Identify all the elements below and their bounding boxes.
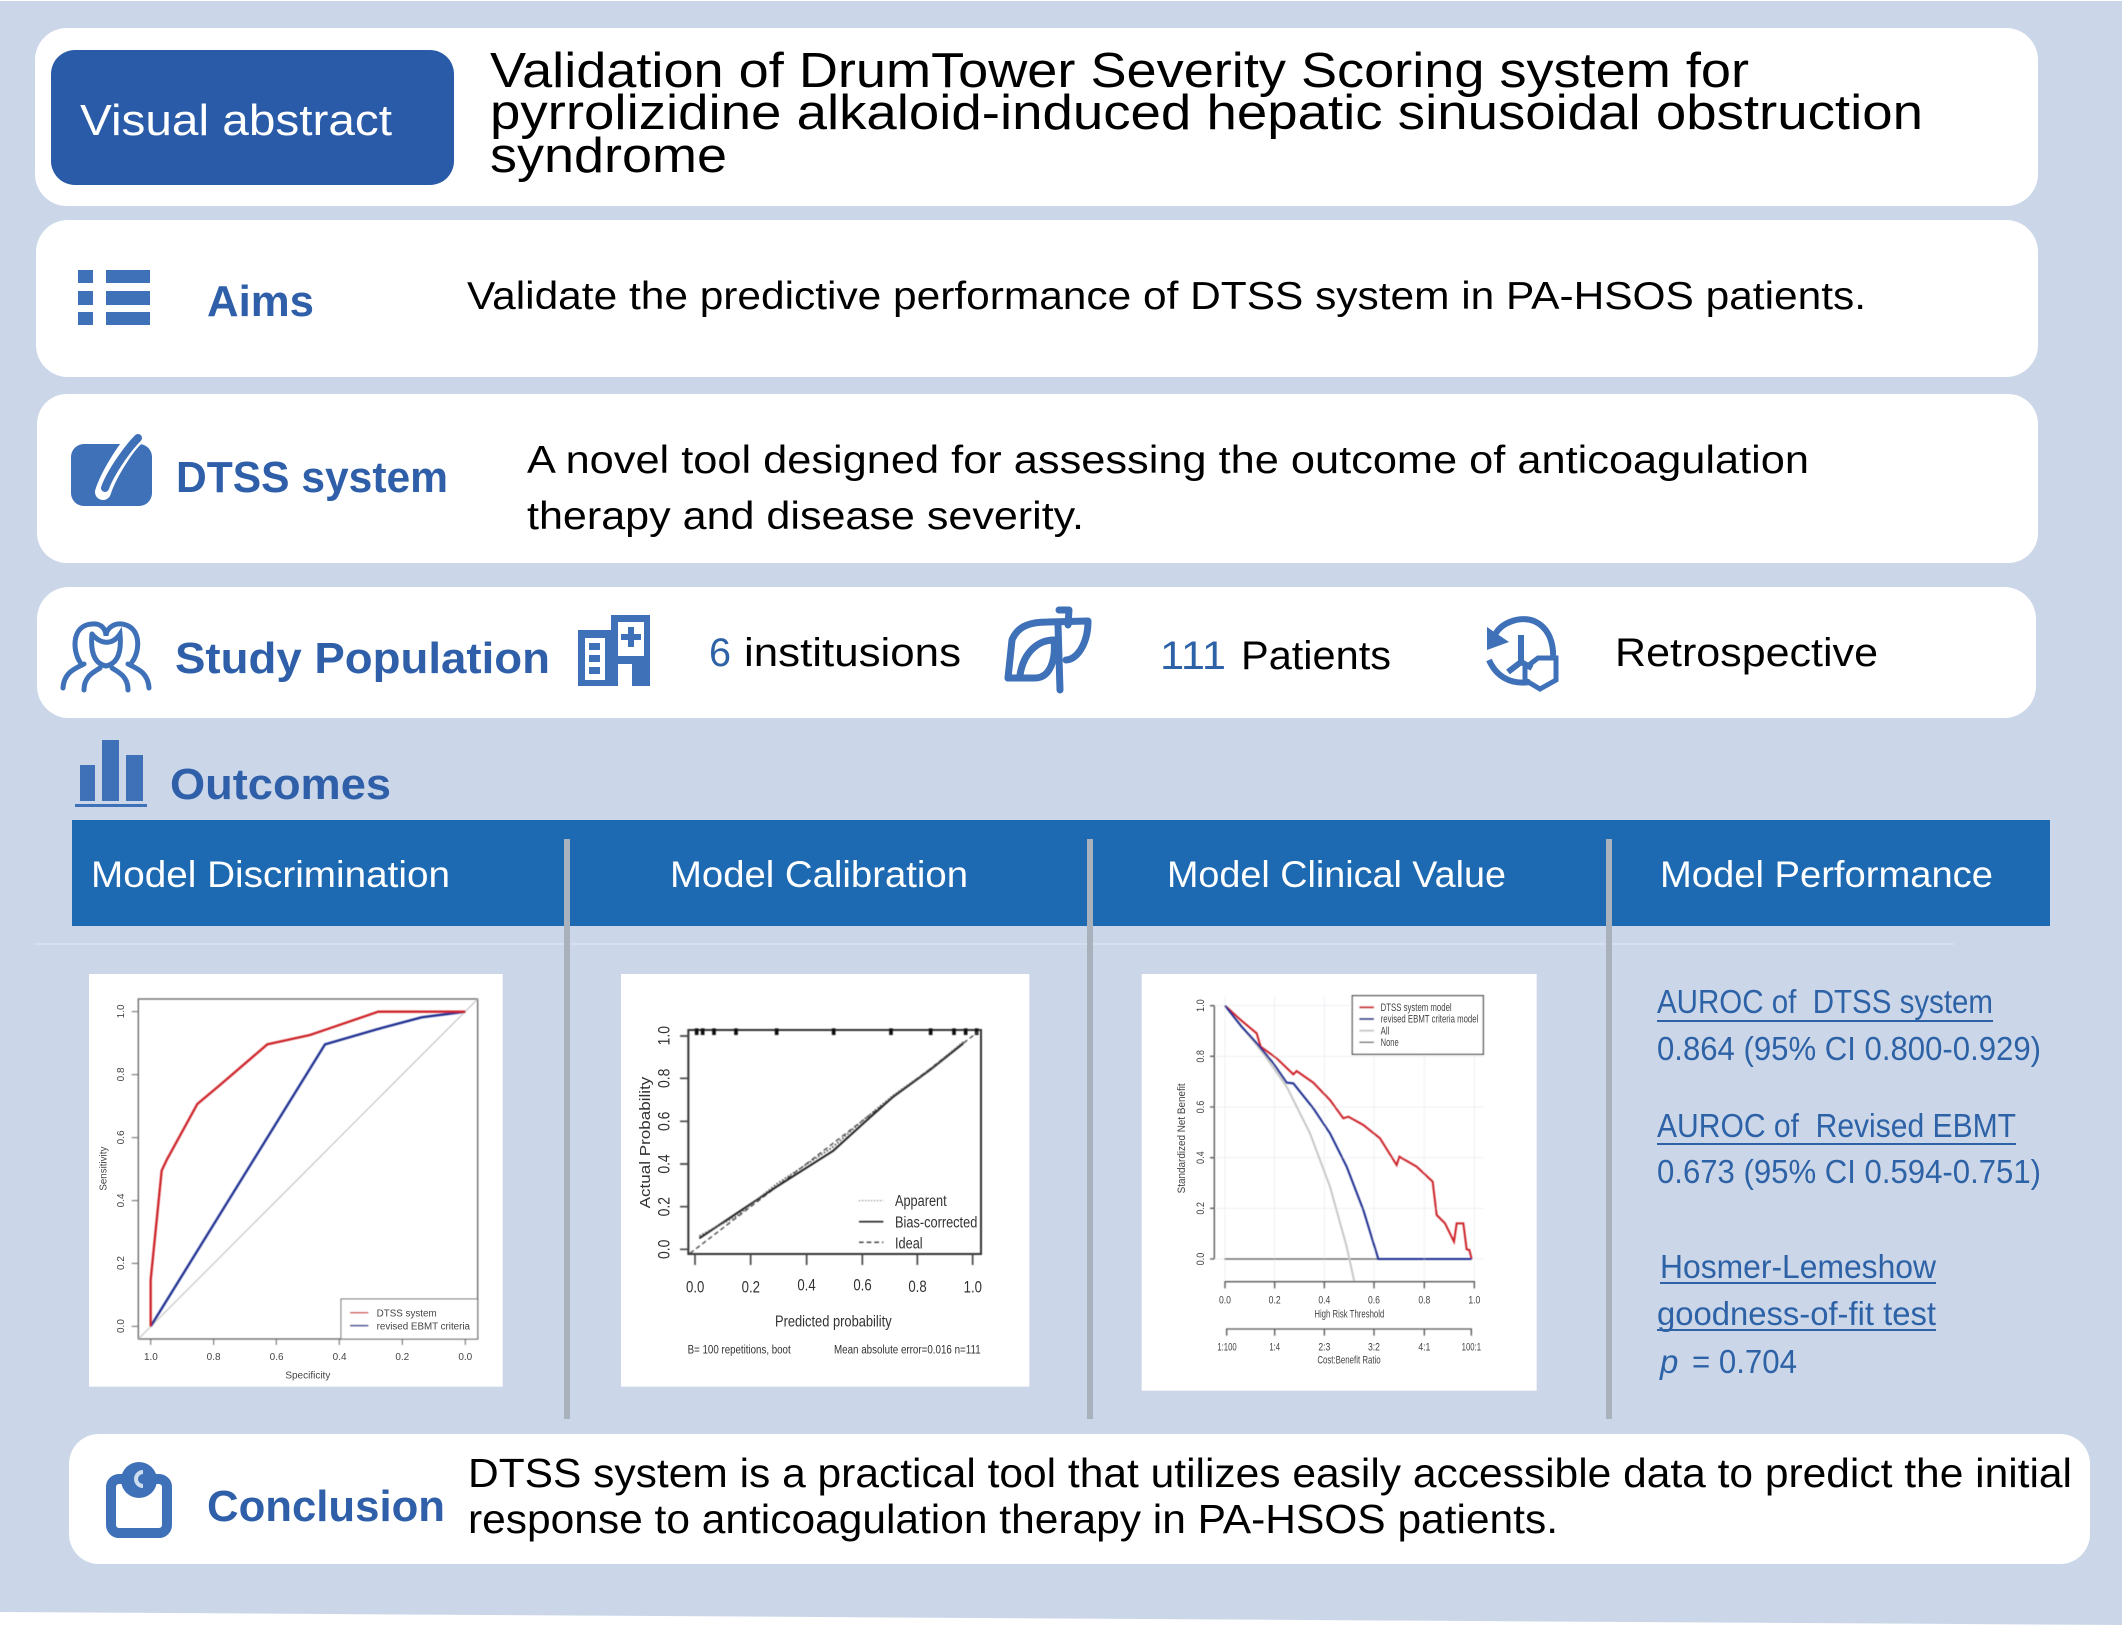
icon: list [78, 270, 150, 325]
AUROC of DTSS system: 0.864 (95% CI 0.800-0.929) [1657, 1030, 2041, 1067]
chart: calibration: 0.6 [654, 1112, 673, 1131]
aims text: Validate the predictive performance of DTSS system in PA-HSOS patients. [467, 275, 1866, 318]
chart: decision curve: 1:100 [1217, 1342, 1237, 1354]
conclusion text: response to anticoagulation therapy in PA-HSOS patients. [468, 1496, 1558, 1542]
DTSS description [527, 439, 1809, 538]
chart: calibration: 0.4 [797, 1276, 816, 1295]
chart: decision curve: 1.0 [1468, 1294, 1480, 1306]
chart: calibration: Actual Probability [638, 1076, 654, 1208]
panel: title [35, 28, 2038, 206]
institutions count: 6 [709, 631, 731, 675]
outcomes table header: Model Discrimination [91, 854, 450, 895]
chart: ROC curves [89, 974, 503, 1387]
chart: calibration: Ideal [895, 1235, 923, 1252]
chart: decision curve: 0.0 [1219, 1294, 1231, 1306]
Hosmer-Lemeshow test [1657, 1248, 1936, 1380]
chart: calibration: 0.8 [908, 1277, 927, 1296]
patients count: Patients [1241, 634, 1391, 678]
chart: ROC curves: revised EBMT criteria [377, 1321, 470, 1332]
chart: decision curve: 0.8 [1195, 1050, 1207, 1063]
chart: decision curve: All [1381, 1025, 1389, 1037]
chart: ROC curves: Specificity [285, 1370, 330, 1381]
visual abstract badge: Visual abstract [80, 96, 392, 145]
AUROC of revised EBMT: AUROC of Revised EBMT [1657, 1107, 2016, 1144]
icon: hospital [578, 615, 650, 686]
chart: ROC curves: 0.6 [116, 1130, 127, 1144]
title text: pyrrolizidine alkaloid-induced hepatic sinusoidal obstruction [490, 86, 1923, 140]
Hosmer-Lemeshow test: p [1659, 1343, 1678, 1380]
patients count [1160, 634, 1391, 678]
conclusion heading: Conclusion [207, 1482, 445, 1531]
chart: decision curve: 3:2 [1368, 1342, 1380, 1354]
chart: decision curve: DTSS system model [1381, 1002, 1452, 1014]
DTSS description: therapy and disease severity. [527, 495, 1084, 538]
chart: ROC curves: 0.8 [116, 1067, 127, 1081]
AUROC of DTSS system: AUROC of DTSS system [1657, 983, 1993, 1020]
chart: calibration: 1.0 [654, 1026, 673, 1045]
chart: ROC curves: 1.0 [116, 1004, 127, 1018]
visual abstract badge [51, 50, 454, 185]
chart: ROC curves: 0.6 [270, 1352, 284, 1363]
chart: decision curve: Standardized Net Benefit [1176, 1083, 1188, 1193]
panel: DTSS system [37, 394, 2038, 563]
chart: ROC curves: 1.0 [144, 1352, 158, 1363]
chart: calibration: 1.0 [964, 1278, 982, 1297]
chart: calibration: Bias-corrected [895, 1214, 977, 1231]
icon: people [63, 624, 149, 690]
chart: decision curve: 100:1 [1462, 1342, 1481, 1354]
model performance statistics [1657, 983, 2041, 1380]
chart: decision curve: 0.6 [1195, 1101, 1207, 1113]
outcomes table header: Model Calibration [670, 854, 968, 895]
outcomes heading [75, 740, 391, 809]
chart: ROC curves: 0.0 [116, 1319, 127, 1333]
chart: ROC curves: 0.8 [207, 1352, 221, 1363]
chart: calibration: B= 100 repetitions, boot [688, 1342, 791, 1356]
chart: calibration: 0.0 [654, 1240, 673, 1259]
chart: calibration: 0.6 [853, 1276, 872, 1295]
chart: decision curve: 0.2 [1269, 1294, 1281, 1306]
chart: ROC curves: 0.0 [458, 1352, 473, 1363]
retrospective label: Retrospective [1615, 631, 1878, 675]
chart: decision curve: Cost:Benefit Ratio [1317, 1354, 1381, 1366]
Hosmer-Lemeshow test: Hosmer-Lemeshow [1660, 1248, 1936, 1285]
chart: decision curve [1142, 974, 1537, 1391]
outcomes table header [72, 820, 2050, 926]
AUROC of revised EBMT [1657, 1107, 2041, 1190]
DTSS heading: DTSS system [176, 453, 448, 502]
Hosmer-Lemeshow test: goodness-of-fit test [1657, 1295, 1936, 1332]
AUROC of DTSS system [1657, 983, 2041, 1067]
chart: calibration: 0.4 [654, 1154, 673, 1174]
icon: bar chart [75, 740, 147, 807]
institutions count: institusions [744, 631, 961, 675]
outcomes table header: Model Performance [1660, 854, 1993, 895]
aims heading: Aims [207, 277, 314, 326]
chart: calibration [621, 974, 1029, 1387]
chart: decision curve: None [1381, 1037, 1399, 1049]
chart: ROC curves: 0.4 [116, 1193, 127, 1207]
study population heading: Study Population [175, 634, 550, 683]
faint divider [34, 943, 1954, 945]
chart: calibration: 0.0 [686, 1278, 704, 1297]
chart: ROC curves: 0.2 [395, 1352, 410, 1363]
chart: decision curve: 4:1 [1418, 1342, 1430, 1354]
chart: decision curve: 0.0 [1195, 1253, 1207, 1265]
title text: Validation of DrumTower Severity Scoring system for [490, 44, 1749, 98]
Hosmer-Lemeshow test: = 0.704 [1692, 1343, 1797, 1380]
chart: calibration: Mean absolute error=0.016 n=111 [834, 1342, 981, 1356]
panel: conclusion [69, 1434, 2090, 1564]
chart: decision curve: 2:3 [1318, 1342, 1330, 1354]
conclusion text [468, 1450, 2072, 1542]
chart: decision curve: High Risk Threshold [1314, 1309, 1384, 1321]
panel: aims [36, 220, 2038, 377]
DTSS description: A novel tool designed for assessing the outcome of anticoagulation [527, 439, 1809, 482]
chart: decision curve: 0.4 [1318, 1294, 1330, 1306]
icon: liver [1008, 610, 1088, 690]
chart: decision curve: 0.4 [1195, 1151, 1207, 1164]
chart: ROC curves: DTSS system [377, 1309, 437, 1320]
outcomes table header: Model Clinical Value [1167, 854, 1506, 895]
chart: ROC curves: 0.4 [333, 1352, 347, 1363]
chart: calibration: 0.2 [654, 1197, 673, 1216]
outcomes heading: Outcomes [170, 760, 391, 809]
chart: decision curve: 1:4 [1269, 1342, 1280, 1354]
icon: pen on tablet [71, 438, 152, 506]
chart: ROC curves: 0.2 [116, 1256, 127, 1270]
panel: study population [37, 587, 2036, 718]
title text [490, 44, 1923, 183]
conclusion text: DTSS system is a practical tool that utilizes easily accessible data to predict the initial [468, 1450, 2072, 1496]
chart: decision curve: 0.2 [1195, 1202, 1207, 1215]
chart: decision curve: revised EBMT criteria model [1381, 1014, 1478, 1026]
chart: calibration: Apparent [895, 1193, 947, 1210]
chart: decision curve: 1.0 [1195, 999, 1207, 1012]
chart: calibration: Predicted probability [775, 1314, 892, 1331]
chart: ROC curves: Sensitivity [99, 1147, 110, 1191]
chart: decision curve: 0.6 [1368, 1294, 1380, 1306]
chart: decision curve: 0.8 [1418, 1294, 1430, 1306]
column separators [564, 839, 1612, 1419]
icon: clipboard [111, 1462, 167, 1533]
patients count: 111 [1160, 634, 1226, 678]
chart: calibration: 0.8 [654, 1069, 673, 1088]
icon: retrospective clock [1487, 619, 1556, 689]
title text: syndrome [490, 129, 727, 183]
chart: calibration: 0.2 [742, 1278, 760, 1297]
AUROC of revised EBMT: 0.673 (95% CI 0.594-0.751) [1657, 1153, 2041, 1190]
